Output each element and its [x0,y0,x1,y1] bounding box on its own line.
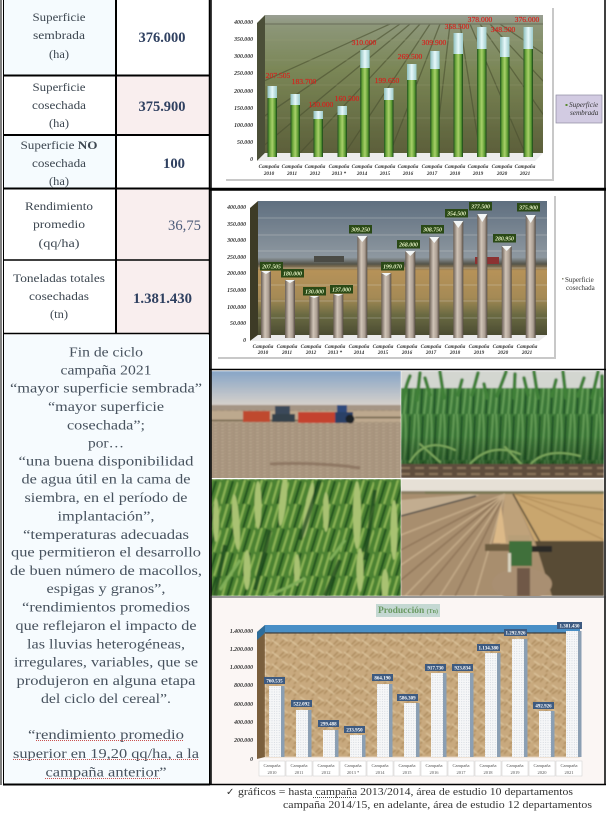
panel: chart producción [211,598,605,784]
x axis labels: 2017 [425,350,437,356]
x axis labels: Campaña [373,344,394,350]
x axis labels: Campaña [301,344,322,350]
value labels: 130.000 [309,100,334,109]
summary heading [60,346,152,378]
x axis labels: Campaña [329,164,350,170]
row: toneladas totales [13,271,192,321]
x axis labels: 2011 [281,350,292,356]
x axis labels: 2010 [257,350,269,356]
summary body text: que permitieron el desarrollo [11,546,201,561]
x axis labels [259,761,582,776]
value labels: 199.070 [383,264,402,270]
x axis labels [259,164,536,177]
value labels: 1.381.430 [560,624,580,630]
value labels: 377.500 [470,204,490,210]
x axis labels: 2018 [449,171,461,177]
bars [269,631,582,757]
value labels: 492.926 [535,704,552,710]
row: superficie sembrada: Superficie [32,10,86,24]
y axis labels: 200.000 [226,271,246,277]
x axis labels: 2012 [309,171,321,177]
y axis labels: 100.000 [234,123,253,129]
value labels: 864.190 [374,676,391,682]
y axis labels: 250.000 [233,71,253,77]
summary body text: implantación”, [58,510,154,525]
y axis labels: 400.000 [233,20,253,26]
row: superficie cosechada: cosechada [32,98,87,112]
value labels: 137.000 [332,288,351,294]
summary body text: “mayor superficie [48,400,164,415]
value labels: 586.309 [399,696,416,702]
x axis labels: Campaña [469,344,490,350]
x axis labels: Campaña [422,164,443,170]
value labels: 522.092 [293,702,310,708]
x axis labels: 2019 [510,770,520,775]
x axis labels: 2014 [356,171,368,177]
summary body text: las lluvias heterogéneas, [27,637,185,652]
legend: superficie cosechada: cosechada [566,284,596,292]
value labels: 923.834 [454,666,471,672]
y axis labels: 800.000 [234,683,253,689]
legend: superficie sembrada [556,95,602,123]
value labels: 308.750 [422,228,442,234]
chart walls [250,201,547,341]
value labels: 233.950 [346,728,363,734]
x axis labels: 2014 [376,770,385,775]
x axis labels: Campaña [506,763,524,768]
value labels: 376.000 [515,15,540,24]
row: rendimiento promedio: Rendimiento [25,199,93,213]
x axis labels: 2020 [538,770,547,775]
closing statement: superior en 19,20 qq/ha, a la [13,747,200,762]
x axis labels: 2013 * [331,170,347,177]
row: toneladas totales: (tn) [50,307,68,321]
photo: combine harvester [401,479,604,600]
footnote: campaña 2014/15, en adelante, área de estudio 12 departamentos [283,799,592,811]
legend: superficie cosechada [562,276,596,292]
chart title: Producción (Tn) [378,606,438,616]
x axis labels: 2010 [268,770,277,775]
legend: superficie cosechada: Superficie [565,276,594,284]
row: rendimiento promedio [25,199,201,250]
y axis labels: 400.000 [226,205,246,211]
value labels: 375.900 [518,206,538,212]
summary body text: de agua útil en la cama de [22,473,190,488]
value labels: 160.500 [335,94,360,103]
summary body text: siembra, en el período de [24,491,188,506]
y axis labels: 150.000 [227,288,246,294]
x axis labels: Campaña [560,763,578,768]
x axis labels: Campaña [253,344,274,350]
y axis labels: 300.000 [233,54,253,60]
x axis labels: 2011 [286,171,297,177]
value labels: 1.134.380 [478,646,499,652]
y axis labels [226,205,246,344]
x axis labels: 2018 [484,770,493,775]
x axis labels: Campaña [517,344,538,350]
row: superficie sembrada: (ha) [49,47,69,61]
x axis labels: 2012 [322,770,330,775]
summary body text: “rendimientos promedios [22,601,190,616]
value labels: 354.500 [446,212,466,218]
photo: wheat ears [211,474,401,601]
value labels: 309.900 [422,38,447,47]
summary body text: “una buena disponibilidad [18,455,194,470]
row: superficie no cosechada: Superficie NO [20,138,98,152]
summary heading: campaña 2021 [60,364,152,378]
x axis labels: Campaña [493,344,514,350]
chart walls [257,625,580,759]
x axis labels: 2010 [263,171,275,177]
value labels: 269.500 [398,52,423,61]
y axis labels: 0 [250,757,253,763]
x axis labels: Campaña [452,763,470,768]
x axis labels [253,344,538,356]
value labels: 299.488 [320,722,337,728]
footnote: ✓ [226,787,234,798]
row: superficie cosechada: 375.900 [138,99,186,115]
bars [268,27,533,157]
row: superficie sembrada [32,10,186,61]
x axis labels: 2015 [377,350,389,356]
panel: fin de ciclo text [3,335,210,784]
x axis labels: Campaña [534,763,550,768]
y axis labels: 0 [250,157,253,163]
value labels: 207.505 [266,71,291,80]
x axis labels: Campaña [398,164,419,170]
value labels: 199.650 [375,76,400,85]
summary body text: “mayor superficie sembrada” [10,382,202,397]
value labels: 180.000 [283,272,302,278]
footnote [226,786,592,811]
value labels: 280.950 [494,236,514,242]
value labels: 1.292.926 [506,632,526,636]
summary body text [10,382,202,707]
x axis labels: Campaña [397,344,418,350]
x axis labels: 2016 [401,350,413,356]
x axis labels: 2021 [564,770,574,775]
x axis labels: 2011 [295,770,303,775]
value labels: 917.730 [427,666,444,672]
value labels [260,202,540,296]
photo: sowing tractors [211,371,401,480]
summary body text: que reflejaron el impacto de [16,619,196,634]
x axis labels: 2015 [379,171,391,177]
y axis labels: 1.000.000 [230,665,253,671]
y axis labels: 100.000 [227,305,246,311]
y axis labels: 300.000 [226,238,246,244]
x axis labels: Campaña [290,763,308,768]
value labels: 268.000 [398,242,418,248]
x axis labels: Campaña [480,763,496,768]
x axis labels: Campaña [352,164,373,170]
row: rendimiento promedio: (qq/ha) [38,236,80,250]
x axis labels: 2021 [519,171,531,177]
x axis labels: Campaña [375,164,396,170]
x axis labels: 2013 * [327,349,343,356]
photo: green wheat stems [401,371,604,478]
summary heading: Fin de ciclo [69,346,143,361]
x axis labels: Campaña [282,164,303,170]
bars [261,214,536,338]
value labels [264,622,582,734]
x axis labels: Campaña [426,763,442,768]
row: superficie no cosechada: 100 [163,156,185,172]
y axis labels: 150.000 [234,106,253,112]
x axis labels: 2019 [473,350,485,356]
x axis labels: Campaña [277,344,298,350]
footnote: gráficos = hasta campaña 2013/2014, área de estudio 10 departamentos [238,786,573,798]
x axis labels: 2020 [497,350,509,356]
y axis labels: 200.000 [233,89,253,95]
closing statement [13,728,200,781]
row: superficie no cosechada [20,138,185,188]
closing statement: “rendimiento promedio [28,728,184,743]
y axis labels [230,629,253,763]
x axis labels: Campaña [344,763,362,768]
x axis labels: 2015 [402,770,412,775]
y axis labels: 200.000 [233,738,253,744]
row: toneladas totales: cosechadas [29,289,89,303]
y axis labels: 250.000 [226,255,246,261]
row: rendimiento promedio: 36,75 [168,218,201,234]
value labels: 310.000 [352,38,377,47]
x axis labels: 2013 * [347,770,360,775]
value labels [266,15,540,109]
x axis labels: 2018 [449,350,461,356]
summary body text: cosechada”; [67,418,145,433]
legend: superficie sembrada: sembrada [570,109,599,117]
x axis labels: Campaña [468,164,489,170]
y axis labels: 50.000 [230,321,246,327]
x axis labels: 2016 [402,171,414,177]
value labels: 183.700 [292,77,317,86]
x axis labels: Campaña [421,344,442,350]
value labels: 378.000 [468,15,493,24]
row: superficie cosechada [32,80,186,130]
x axis labels: Campaña [325,344,346,350]
y axis labels: 1.200.000 [230,647,253,653]
x axis labels: Campaña [445,344,466,350]
y axis labels [233,20,253,163]
legend: superficie sembrada: Superficie [569,101,599,109]
panel: chart superficie cosechada [211,190,605,369]
value labels: 760.535 [266,680,283,684]
x axis labels: Campaña [318,763,334,768]
summary body text: produjeron en alguna etapa [16,674,196,689]
x axis labels: Campaña [305,164,326,170]
row: toneladas totales: 1.381.430 [133,291,192,307]
x axis labels: 2019 [472,171,484,177]
closing statement: campaña anterior” [46,766,166,781]
summary body text: “temperaturas adecuadas [23,528,189,543]
value labels: 309.250 [350,228,370,234]
y axis labels: 400.000 [233,720,253,726]
summary body text: de buen número de macollos, [10,564,202,579]
value labels: 130.000 [305,290,324,296]
summary body text: por… [88,437,124,452]
x axis labels: 2017 [456,770,466,775]
y axis labels: 350.000 [226,222,246,228]
x axis labels: 2012 [305,350,317,356]
x axis labels: Campaña [259,164,280,170]
row: rendimiento promedio: promedio [33,217,85,231]
x axis labels: Campaña [398,763,416,768]
panel: chart superficie sembrada [226,8,602,181]
row: toneladas totales: Toneladas totales [13,271,105,285]
x axis labels: Campaña [445,164,466,170]
x axis labels: 2020 [496,171,508,177]
x axis labels: 2016 [430,770,439,775]
y axis labels: 0 [243,338,246,344]
x axis labels: Campaña [492,164,513,170]
summary body text: espigas y granos”, [46,582,166,597]
row: superficie no cosechada: cosechada [32,156,87,170]
y axis labels: 350.000 [233,37,253,43]
row: superficie cosechada: Superficie [32,80,86,94]
row: superficie sembrada: 376.000 [138,30,186,46]
summary body text: del ciclo del cereal”. [41,692,171,707]
x axis labels: Campaña [515,164,536,170]
summary body text: irregulares, variables, que se [14,656,198,671]
x axis labels: Campaña [349,344,370,350]
row: superficie no cosechada: (ha) [49,174,69,188]
value labels: 358.500 [445,22,470,31]
x axis labels: Campaña [372,763,388,768]
x axis labels: Campaña [264,763,280,768]
data table [1,0,210,785]
value labels: 207.505 [261,264,281,270]
x axis labels: 2021 [521,350,533,356]
row: superficie sembrada: sembrada [33,28,86,42]
y axis labels: 1.400.000 [230,629,253,635]
value labels: 348.500 [491,25,516,34]
y axis labels: 600.000 [234,702,253,708]
x axis labels: 2017 [426,171,438,177]
chart walls [257,15,543,161]
x axis labels: 2014 [353,350,365,356]
row: superficie cosechada: (ha) [49,116,69,130]
y axis labels: 50.000 [237,140,253,146]
